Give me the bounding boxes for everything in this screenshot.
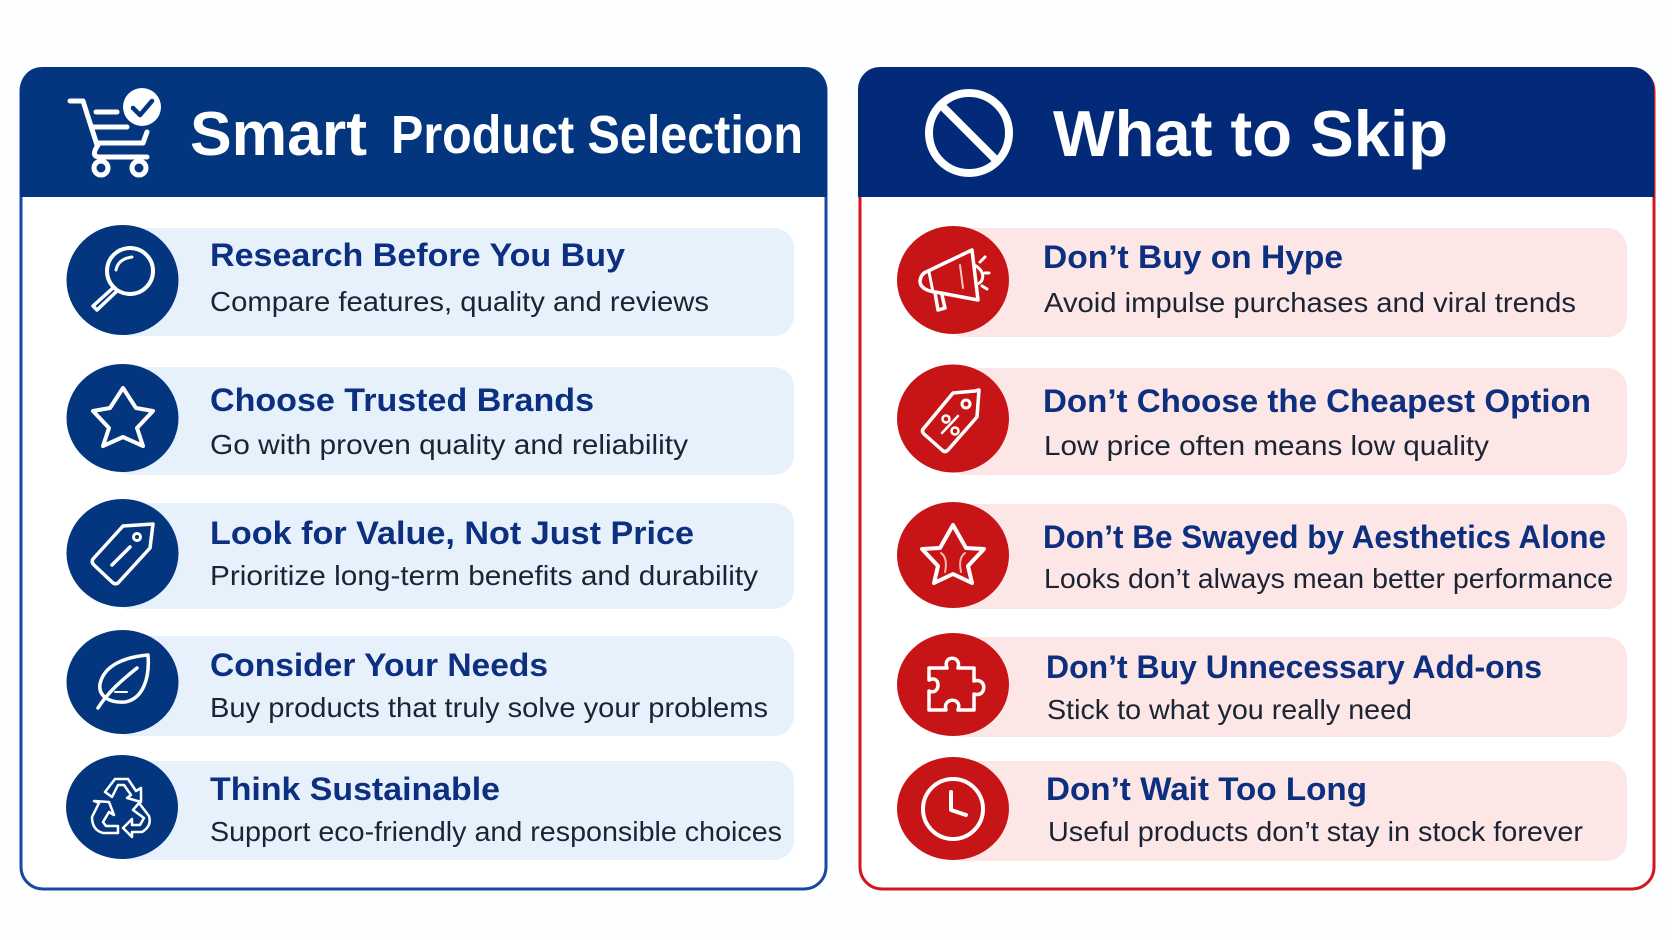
icon: price tag <box>92 524 153 584</box>
row: think sustainable <box>66 755 794 860</box>
row: don't be swayed by aesthetics alone: Don’t Be Swayed by Aesthetics Alone <box>1043 519 1606 555</box>
title: what to skip: What to Skip <box>1053 97 1448 170</box>
row: look for value: Look for Value, Not Just Price <box>210 515 694 551</box>
row: don't buy on hype: Don’t Buy on Hype <box>1043 239 1343 275</box>
icon: leaf <box>98 655 148 708</box>
row: don't wait too long <box>897 757 1627 861</box>
row: don't choose the cheapest option <box>897 364 1627 475</box>
row: don't buy on hype <box>897 226 1627 337</box>
row: choose trusted brands: Choose Trusted Brands <box>210 382 594 418</box>
row: think sustainable: Support eco-friendly and responsible choices <box>210 816 782 847</box>
row: research before you buy <box>66 225 794 336</box>
row: consider your needs: Consider Your Needs <box>210 647 548 683</box>
icon: percent price tag <box>922 390 979 452</box>
row: think sustainable: Think Sustainable <box>210 771 500 807</box>
row: don't buy unnecessary add-ons <box>897 633 1627 737</box>
row: don't buy unnecessary add-ons: Stick to what you really need <box>1047 694 1412 725</box>
title: smart product selection: Product Selection <box>391 105 803 165</box>
row: don't be swayed by aesthetics alone <box>897 502 1627 609</box>
icon: puzzle piece <box>929 658 984 710</box>
row: don't wait too long: Don’t Wait Too Long <box>1046 771 1367 807</box>
row: consider your needs: Buy products that truly solve your problems <box>210 692 768 723</box>
icon: recycle arrows <box>92 779 150 837</box>
row: choose trusted brands <box>66 364 794 475</box>
row: don't wait too long: Useful products don’t stay in stock forever <box>1048 816 1583 847</box>
row: choose trusted brands: Go with proven quality and reliability <box>210 429 688 460</box>
panel: what to skip <box>858 67 1654 889</box>
icon: shiny star <box>922 525 984 583</box>
icon: magnifying glass <box>93 248 153 310</box>
row: consider your needs <box>66 630 794 736</box>
row: look for value <box>66 499 794 609</box>
icon: star <box>93 388 153 446</box>
title: smart product selection <box>190 100 803 169</box>
icon: clock <box>923 779 983 839</box>
row: look for value: Prioritize long-term benefits and durability <box>210 560 758 591</box>
row: research before you buy: Research Before You Buy <box>210 237 625 273</box>
title: smart product selection: Smart <box>190 100 367 169</box>
icon: prohibited sign <box>929 93 1009 173</box>
icon: shopping cart with check <box>70 88 161 175</box>
row: don't be swayed by aesthetics alone: Looks don’t always mean better performance <box>1044 563 1613 594</box>
header: what to skip <box>858 67 1654 197</box>
panel: smart product selection <box>20 67 827 889</box>
header: smart product selection <box>20 67 827 197</box>
row: research before you buy: Compare features, quality and reviews <box>210 286 709 317</box>
row: don't choose the cheapest option: Don’t Choose the Cheapest Option <box>1043 383 1591 419</box>
row: don't buy unnecessary add-ons: Don’t Buy Unnecessary Add-ons <box>1046 649 1542 685</box>
row: don't buy on hype: Avoid impulse purchases and viral trends <box>1044 287 1576 318</box>
icon: megaphone <box>920 250 989 310</box>
row: don't choose the cheapest option: Low price often means low quality <box>1044 430 1489 461</box>
